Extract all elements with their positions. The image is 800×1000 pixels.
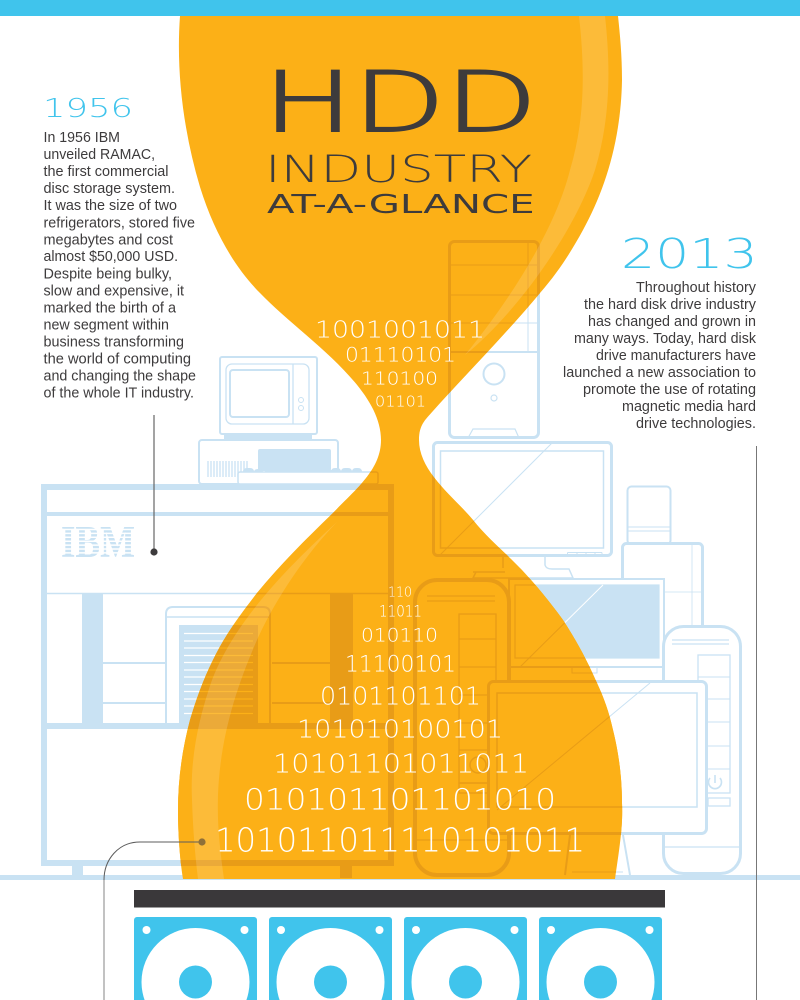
binary stream upper: 01110101 <box>345 344 456 366</box>
binary stream lower: 110 <box>388 584 412 600</box>
binary stream upper: 01101 <box>375 392 426 410</box>
callout line: drives <box>104 838 206 1000</box>
text block: 2013: drive technologies. <box>636 416 756 432</box>
title: AT-A-GLANCE <box>267 189 535 219</box>
binary stream lower: 010101101101010 <box>244 782 556 816</box>
text block: 1956: disc storage system. <box>44 181 175 197</box>
text block: 2013: magnetic media hard <box>622 399 756 415</box>
binary stream lower: 11100101 <box>345 652 456 678</box>
hard drive 3 <box>404 917 527 1000</box>
binary stream upper: 110100 <box>361 370 438 390</box>
heading: 2013: 2013 <box>621 231 758 278</box>
text block: 2013: many ways. Today, hard disk <box>574 331 757 347</box>
text block: 2013: drive manufacturers have <box>596 348 756 364</box>
text block: 1956: new segment within <box>44 318 169 334</box>
text block: 1956: business transforming <box>44 334 184 350</box>
text block: 1956: unveiled RAMAC, <box>44 147 155 163</box>
binary stream lower: 11011 <box>379 602 422 620</box>
binary stream lower <box>215 584 585 860</box>
binary stream lower: 010110 <box>361 624 438 646</box>
tower computer <box>450 242 538 438</box>
illustrations seen through hourglass <box>178 240 622 878</box>
text block: 1956: In 1956 IBM <box>44 130 120 146</box>
binary stream lower: 10101101011011 <box>273 750 529 780</box>
hourglass <box>170 10 630 880</box>
dark heading bar <box>134 890 665 908</box>
text block: 1956: megabytes and cost <box>44 232 173 248</box>
heading: 1956: 1956 <box>43 94 133 124</box>
text block: 2013: has changed and grown in <box>588 314 756 330</box>
title: INDUSTRY <box>265 148 532 191</box>
binary stream upper: 1001001011 <box>315 316 485 344</box>
text block: 1956: almost $50,000 USD. <box>44 249 178 265</box>
text block: 2013: Throughout history <box>636 280 757 296</box>
binary stream lower: 101010100101 <box>297 714 503 744</box>
hard drive 2 <box>269 917 392 1000</box>
hourglass highlights <box>192 16 608 879</box>
text block: 1956: slow and expensive, it <box>44 284 184 300</box>
callout line: 1956 <box>150 415 158 556</box>
top bar <box>0 0 800 16</box>
title: HDD <box>263 51 537 154</box>
IBM logo: IBM <box>61 517 135 567</box>
icon: power <box>708 775 722 789</box>
RAMAC cabinet <box>44 487 391 878</box>
text block: 1956: the first commercial <box>44 164 168 180</box>
callout line: 2013 <box>756 446 758 1000</box>
device illustrations <box>44 242 741 878</box>
text block: 1956: the world of computing <box>44 352 191 368</box>
binary stream upper <box>315 316 485 410</box>
text block: 2013: promote the use of rotating <box>583 382 756 398</box>
text block: 2013 <box>563 280 757 432</box>
text block: 1956: marked the birth of a <box>44 300 176 316</box>
right tower <box>663 626 741 874</box>
text block: 1956: Despite being bulky, <box>44 266 172 282</box>
hard drive 1 <box>134 917 257 1000</box>
text block: 1956: It was the size of two <box>44 198 177 214</box>
floor line <box>0 875 800 880</box>
widescreen monitor <box>509 579 664 673</box>
binary stream lower: 0101101101 <box>320 682 481 710</box>
text block: 1956: and changing the shape <box>44 368 196 384</box>
text block: 1956 <box>44 130 196 402</box>
text block: 2013: launched a new association to <box>563 365 756 381</box>
tall computer <box>415 580 509 875</box>
text block: 1956: refrigerators, stored five <box>44 216 195 232</box>
storage box <box>622 486 702 644</box>
text block: 1956: of the whole IT industry. <box>44 386 194 402</box>
desktop PC <box>199 357 378 484</box>
text block: 2013: the hard disk drive industry <box>584 297 757 313</box>
binary stream lower: 101011011110101011 <box>215 820 585 860</box>
hard drive 4 <box>539 917 662 1000</box>
large monitor <box>434 442 612 578</box>
title <box>263 51 537 219</box>
all-in-one tablet monitor <box>488 682 706 875</box>
